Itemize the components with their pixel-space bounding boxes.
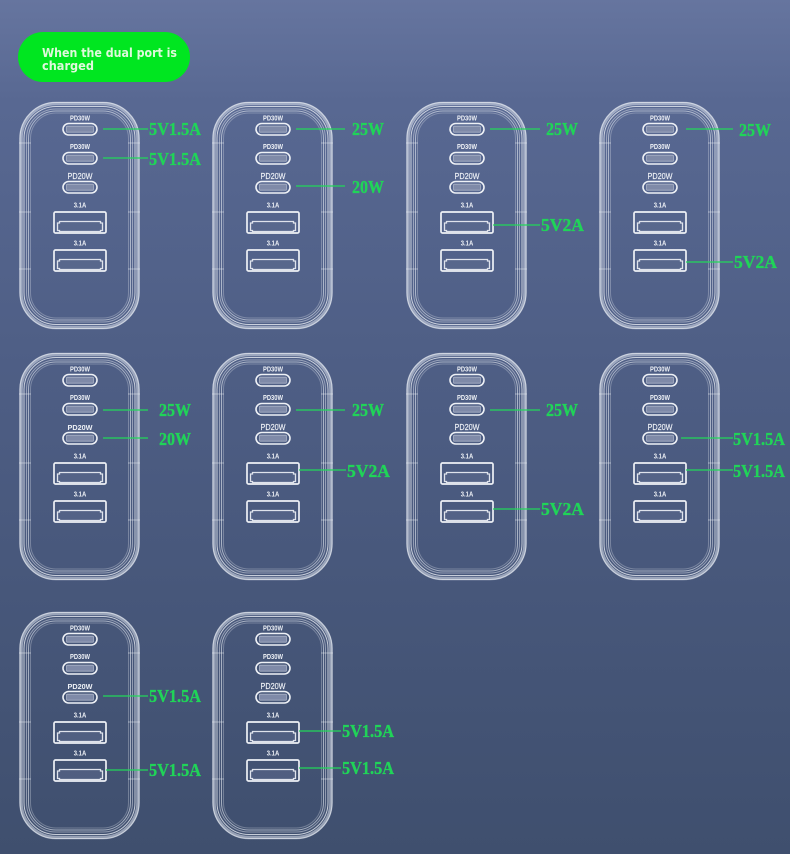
panel: charger 4: 3.1A — [654, 240, 666, 248]
panel: charger 8: 5V1.5A — [733, 429, 785, 449]
panel: charger 6: 25W — [352, 400, 384, 420]
panel: charger 10: 3.1A — [267, 712, 279, 720]
panel: charger 2: 20W — [352, 177, 384, 197]
panel: charger 6: 3.1A — [267, 454, 279, 460]
panel: charger 9: PD20W — [68, 684, 93, 691]
panel: charger 5: 20W — [159, 429, 191, 449]
panel: charger 4: 3.1A — [654, 202, 666, 210]
panel: charger 7: PD30W — [457, 366, 477, 374]
panel: charger 7: 3.1A — [461, 492, 473, 498]
panel: charger 6: PD30W — [263, 395, 283, 402]
panel: charger 1: PD20W — [68, 172, 93, 181]
panel: charger 1: 5V1.5A — [149, 119, 201, 139]
panel: charger 7: PD20W — [454, 423, 480, 432]
panel: charger 7: 5V2A — [541, 499, 584, 519]
panel: charger 4: PD30W — [650, 144, 670, 151]
panel: charger 10: PD20W — [260, 682, 286, 691]
panel: charger 3: PD30W — [457, 116, 477, 122]
panel: charger 2 — [212, 102, 384, 328]
panel: charger 9: PD30W — [70, 654, 90, 661]
panel: charger 8: 3.1A — [654, 454, 666, 460]
panel: charger 10 — [212, 612, 394, 838]
panel: charger 2: 25W — [352, 119, 384, 139]
panel: charger 5: PD20W — [68, 425, 93, 432]
panel: charger 9: 3.1A — [74, 712, 86, 720]
panel: charger 1 — [19, 102, 201, 328]
heading pill — [18, 32, 190, 82]
panel: charger 3: 3.1A — [461, 202, 473, 210]
panel: charger 6: PD20W — [260, 423, 286, 432]
panel: charger 8: PD30W — [650, 366, 670, 374]
panel: charger 3: 5V2A — [541, 215, 584, 235]
panel: charger 3: 25W — [546, 119, 578, 139]
panel: charger 10: PD30W — [263, 654, 283, 661]
panel: charger 3 — [406, 102, 584, 328]
panel: charger 4 — [599, 102, 777, 328]
panel: charger 2: PD30W — [263, 116, 283, 122]
panel: charger 10: 5V1.5A — [342, 758, 394, 778]
panel: charger 6: 5V2A — [347, 461, 390, 481]
panel: charger 7 — [406, 354, 584, 580]
panel: charger 6: PD30W — [263, 366, 283, 374]
panel: charger 1: PD30W — [70, 144, 90, 151]
panel: charger 8: 5V1.5A — [733, 461, 785, 481]
panel: charger 10: PD30W — [263, 626, 283, 632]
panel: charger 1: 3.1A — [74, 202, 86, 210]
panel: charger 2: 3.1A — [267, 202, 279, 210]
panel: charger 7: 3.1A — [461, 454, 473, 460]
panel: charger 10: 3.1A — [267, 750, 279, 758]
panel: charger 2: 3.1A — [267, 240, 279, 248]
panel: charger 8 — [599, 354, 785, 580]
panel: charger 8: 3.1A — [654, 492, 666, 498]
panel: charger 3: PD30W — [457, 144, 477, 151]
panel: charger 9: 3.1A — [74, 750, 86, 758]
panel: charger 8: PD30W — [650, 395, 670, 402]
panel: charger 9: 5V1.5A — [149, 686, 201, 706]
panel: charger 6: 3.1A — [267, 492, 279, 498]
heading pill: charged — [42, 58, 94, 73]
panel: charger 10: 5V1.5A — [342, 721, 394, 741]
panel: charger 4: PD20W — [648, 172, 673, 181]
panel: charger 3: 3.1A — [461, 240, 473, 248]
panel: charger 7: PD30W — [457, 395, 477, 402]
panel: charger 1: 3.1A — [74, 240, 86, 248]
panel: charger 9 — [19, 612, 201, 838]
panel: charger 5: PD30W — [70, 395, 90, 402]
panel: charger 6 — [212, 354, 390, 580]
panel: charger 5: PD30W — [70, 366, 90, 374]
panel: charger 2: PD20W — [260, 172, 286, 181]
panel: charger 9: PD30W — [70, 626, 90, 632]
panel: charger 2: PD30W — [263, 144, 283, 151]
panel: charger 1: 5V1.5A — [149, 149, 201, 169]
panel: charger 9: 5V1.5A — [149, 760, 201, 780]
panel: charger 5: 25W — [159, 400, 191, 420]
panel: charger 4: PD30W — [650, 116, 670, 122]
panel: charger 4: 5V2A — [734, 252, 777, 272]
panel: charger 5: 3.1A — [74, 492, 86, 498]
panel: charger 5 — [19, 354, 191, 580]
panel: charger 7: 25W — [546, 400, 578, 420]
panel: charger 8: PD20W — [648, 423, 673, 432]
heading pill: When the dual port is — [42, 45, 177, 60]
panel: charger 5: 3.1A — [74, 454, 86, 460]
panel: charger 4: 25W — [739, 120, 771, 140]
panel: charger 1: PD30W — [70, 116, 90, 122]
panel: charger 3: PD20W — [454, 172, 480, 181]
